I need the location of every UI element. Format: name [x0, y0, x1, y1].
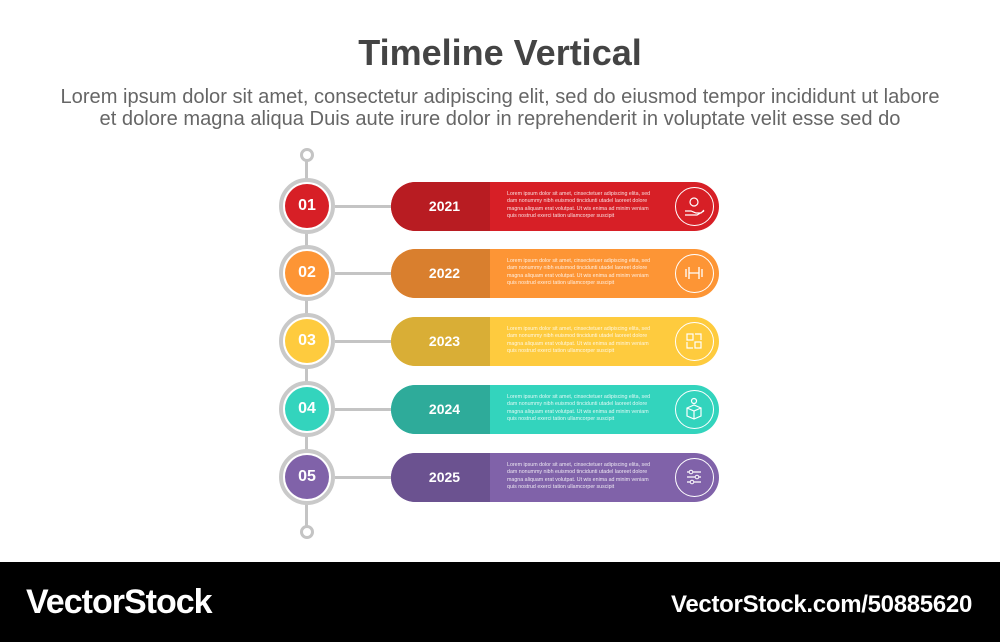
footer logo: VectorStock: [26, 583, 212, 621]
row 03: 2023: [429, 333, 460, 349]
footer: [0, 562, 1000, 642]
row 04: Lorem ipsum dolor sit amet, cinsectetuer adipiscing elita, sed dam nonummy nibh euismod tincidunti utadel laoreet dolore magna aliquam erat volutpat. Ut wis enima ad minim veniam quis nostrud exerci tation ullamcorper suscipit: [507, 394, 650, 422]
row 01: 2021: [429, 198, 460, 214]
timeline axis: [305, 161, 308, 526]
row 05: 05: [298, 468, 316, 485]
subtitle: et dolore magna aliqua Duis aute irure dolor in reprehenderit in voluptate velit esse sed do: [100, 108, 900, 130]
row 03: Lorem ipsum dolor sit amet, cinsectetuer adipiscing elita, sed dam nonummy nibh euismod tincidunti utadel laoreet dolore magna aliquam erat volutpat. Ut wis enima ad minim veniam quis nostrud exerci tation ullamcorper suscipit: [507, 326, 650, 354]
top end dot: [300, 148, 314, 162]
row 05: 2025: [429, 469, 460, 485]
row 03: [279, 313, 719, 369]
row 04: 2024: [429, 401, 460, 417]
row 05: [279, 449, 719, 505]
row 01: [279, 178, 719, 234]
row 02: 2022: [429, 265, 460, 281]
row 02: [279, 245, 719, 301]
subtitle: [60, 86, 940, 130]
title: Timeline Vertical: [358, 32, 642, 73]
row 04: 04: [298, 400, 316, 417]
row 04: [279, 381, 719, 437]
row 02: Lorem ipsum dolor sit amet, cinsectetuer adipiscing elita, sed dam nonummy nibh euismod tincidunti utadel laoreet dolore magna aliquam erat volutpat. Ut wis enima ad minim veniam quis nostrud exerci tation ullamcorper suscipit: [507, 258, 650, 286]
row 02: 02: [298, 264, 316, 281]
subtitle: Lorem ipsum dolor sit amet, consectetur adipiscing elit, sed do eiusmod tempor incididunt ut labore: [60, 86, 940, 108]
row 03: 03: [298, 332, 316, 349]
footer url: VectorStock.com/50885620: [671, 591, 972, 618]
row 05: Lorem ipsum dolor sit amet, cinsectetuer adipiscing elita, sed dam nonummy nibh euismod tincidunti utadel laoreet dolore magna aliquam erat volutpat. Ut wis enima ad minim veniam quis nostrud exerci tation ullamcorper suscipit: [507, 462, 650, 490]
bottom end dot: [300, 525, 314, 539]
row 01: Lorem ipsum dolor sit amet, cinsectetuer adipiscing elita, sed dam nonummy nibh euismod tincidunti utadel laoreet dolore magna aliquam erat volutpat. Ut wis enima ad minim veniam quis nostrud exerci tation ullamcorper suscipit: [507, 191, 650, 219]
row 01: 01: [298, 197, 316, 214]
